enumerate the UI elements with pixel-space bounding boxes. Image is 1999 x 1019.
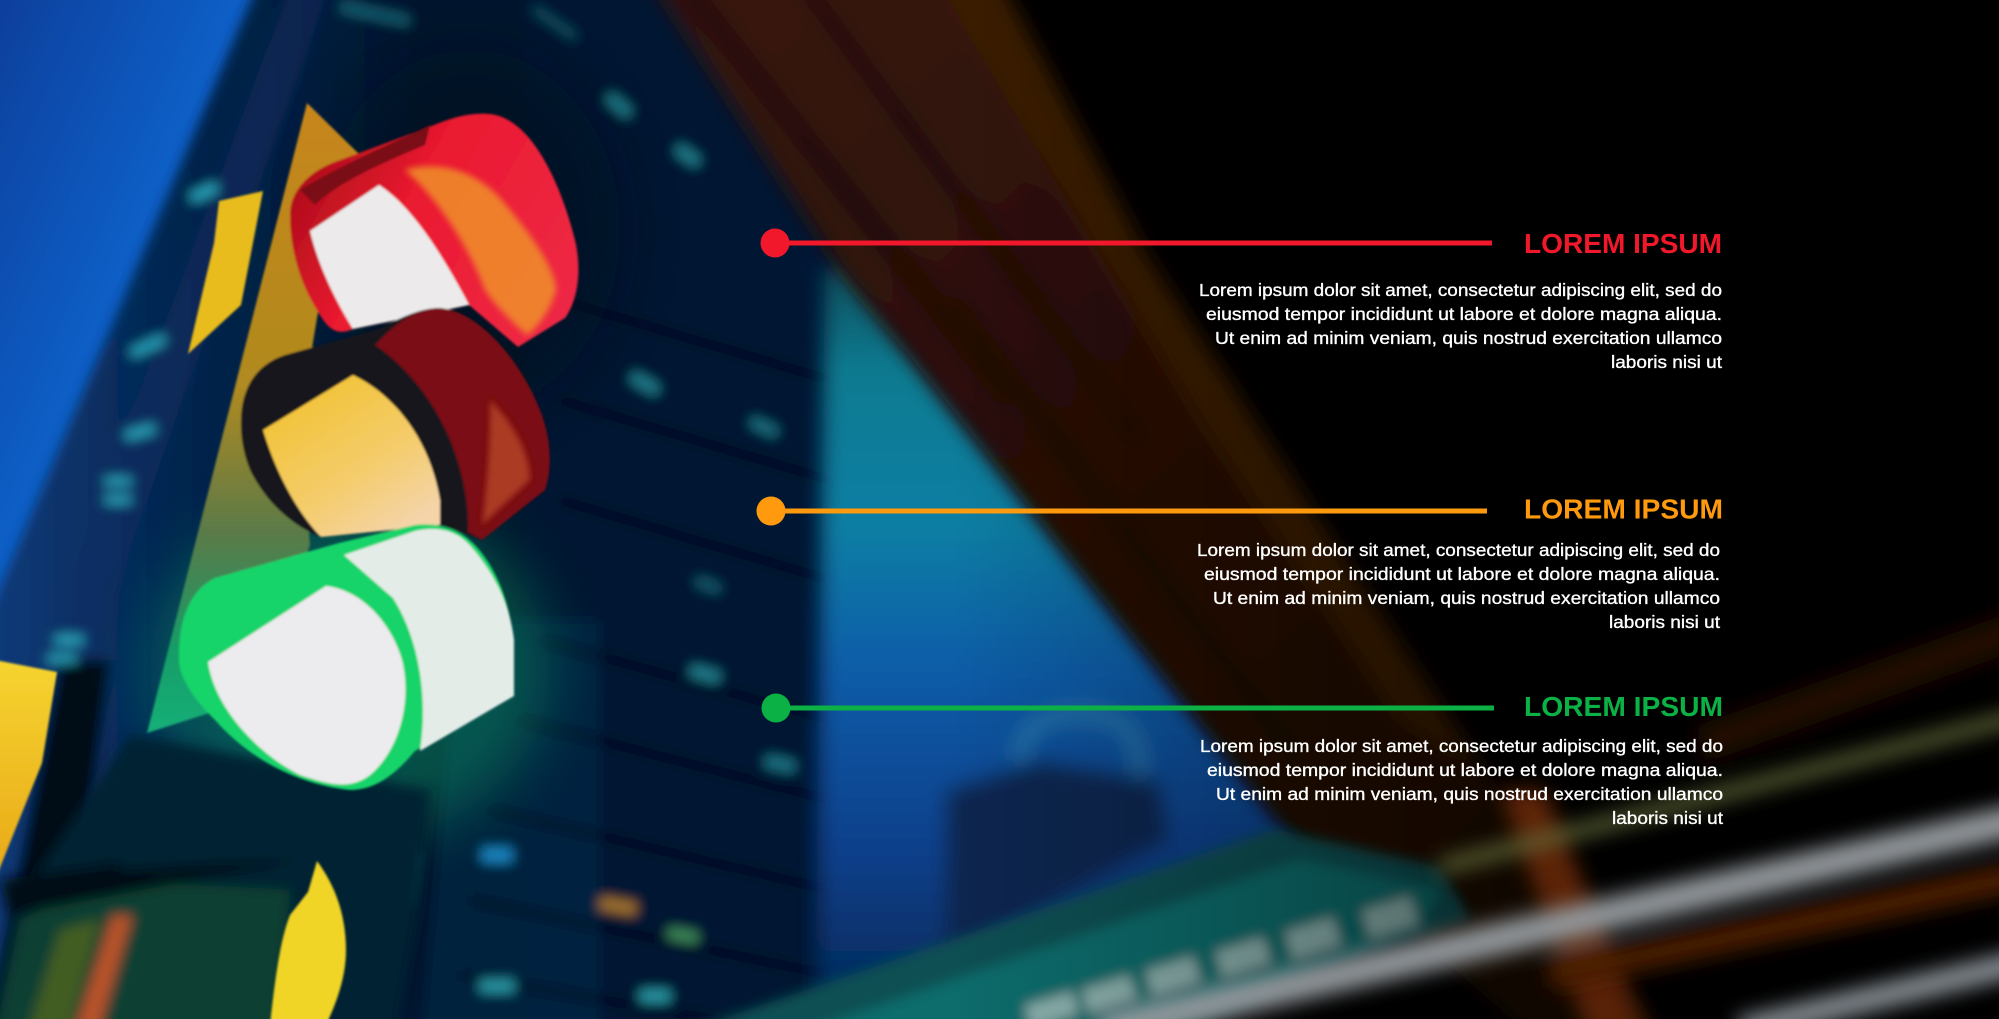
lower housing and pole xyxy=(0,735,430,1019)
orange body text: Ut enim ad minim veniam, quis nostrud exercitation ullamco xyxy=(1213,588,1720,608)
red body text xyxy=(1199,280,1722,372)
orange heading: LOREM IPSUM xyxy=(1524,494,1723,524)
yellow block left xyxy=(0,660,57,880)
green body text: Lorem ipsum dolor sit amet, consectetur adipiscing elit, sed do xyxy=(1200,736,1723,756)
green signal xyxy=(179,524,514,790)
teal glass roof with lit windows xyxy=(660,829,1470,1019)
yellow bracket xyxy=(188,191,263,354)
orange body text: eiusmod tempor incididunt ut labore et dolore magna aliqua. xyxy=(1204,564,1720,584)
green body text xyxy=(1200,736,1723,828)
green leader line xyxy=(762,694,1494,722)
red body text: laboris nisi ut xyxy=(1611,352,1722,372)
red leader line xyxy=(760,228,1492,258)
red heading: LOREM IPSUM xyxy=(1524,228,1722,259)
green body text: laboris nisi ut xyxy=(1612,808,1723,828)
green body text: Ut enim ad minim veniam, quis nostrud exercitation ullamco xyxy=(1216,784,1723,804)
green heading: LOREM IPSUM xyxy=(1524,691,1723,722)
light trails xyxy=(1100,622,1999,1019)
green glow xyxy=(150,500,550,840)
orange body text: laboris nisi ut xyxy=(1609,612,1720,632)
dark office tower xyxy=(0,0,845,1019)
item 2: orange callout xyxy=(756,494,1723,632)
distant building silhouette xyxy=(945,760,1170,960)
brown diagonal girder xyxy=(638,0,1680,1019)
blue sky at left xyxy=(0,0,310,760)
red body text: Ut enim ad minim veniam, quis nostrud exercitation ullamco xyxy=(1215,328,1722,348)
item 1: red callout xyxy=(760,228,1722,372)
backplate xyxy=(147,103,360,733)
red body text: eiusmod tempor incididunt ut labore et dolore magna aliqua. xyxy=(1206,304,1722,324)
orange leader line xyxy=(756,496,1487,526)
traffic light xyxy=(0,50,620,1019)
shadow behind the signal heads xyxy=(320,50,620,410)
yellow block bottom xyxy=(270,861,346,1019)
teal sky triangle xyxy=(815,268,1300,1019)
orange body text: Lorem ipsum dolor sit amet, consectetur adipiscing elit, sed do xyxy=(1197,540,1720,560)
green body text: eiusmod tempor incididunt ut labore et dolore magna aliqua. xyxy=(1207,760,1723,780)
item 3: green callout xyxy=(762,691,1723,828)
orange body text xyxy=(1197,540,1720,632)
amber signal xyxy=(241,308,550,540)
red body text: Lorem ipsum dolor sit amet, consectetur adipiscing elit, sed do xyxy=(1199,280,1722,300)
red signal xyxy=(290,114,578,347)
orange strip of girder xyxy=(1500,790,1650,1019)
darkening towards right xyxy=(950,0,1999,1019)
